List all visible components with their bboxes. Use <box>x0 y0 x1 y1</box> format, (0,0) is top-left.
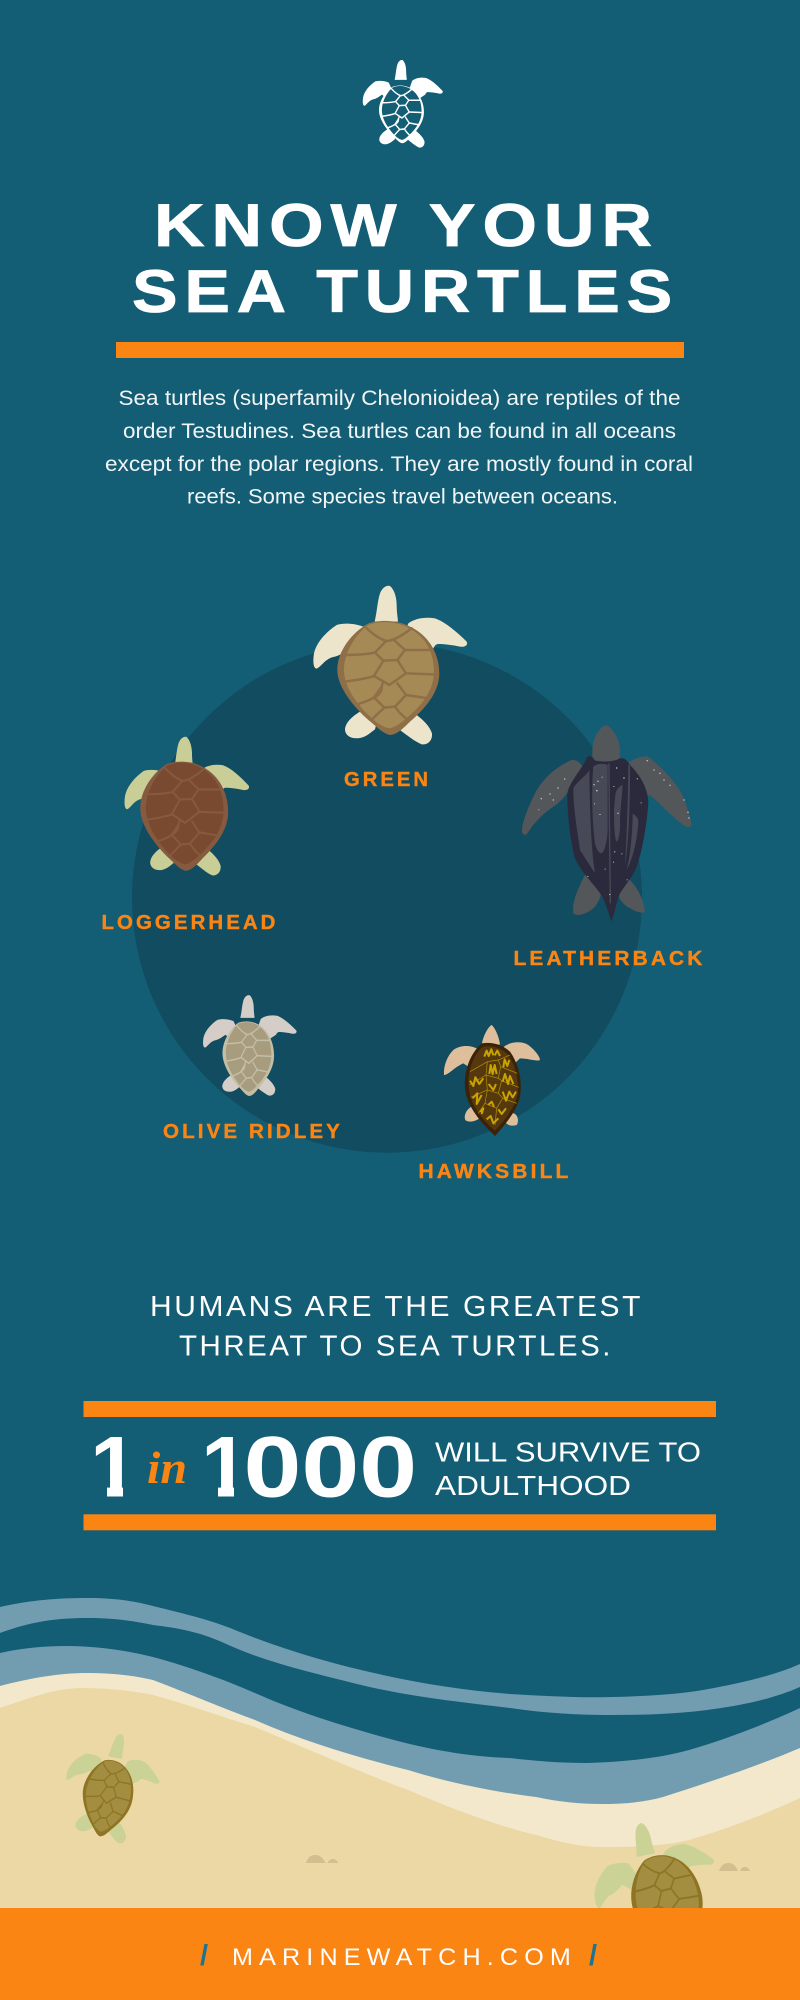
stat bar bottom <box>84 1514 716 1530</box>
stat: 1 in 1000 will survive to adulthood: 000 <box>244 1420 417 1515</box>
turtle: beach right <box>581 1810 733 1976</box>
stat: 1 in 1000 will survive to adulthood: 1 <box>90 1420 138 1516</box>
footer band <box>0 1908 800 2000</box>
turtle: leatherback <box>522 725 692 922</box>
stat: 1 in 1000 will survive to adulthood <box>96 1436 700 1498</box>
threat heading <box>150 1291 643 1362</box>
icon: sand mound centre <box>306 1855 338 1863</box>
stat: 1 in 1000 will survive to adulthood: ADULTHOOD <box>435 1470 631 1501</box>
icon: sand mound right <box>719 1863 750 1871</box>
turtle: hawksbill <box>444 1025 540 1136</box>
stat bar top <box>84 1401 716 1417</box>
turtle: olive ridley <box>203 995 297 1096</box>
title: KNOW YOUR <box>154 192 659 259</box>
label: loggerhead: LOGGERHEAD <box>102 912 278 934</box>
intro text: Sea turtles (superfamily Chelonioidea) are reptiles of the <box>118 387 680 410</box>
label: green: GREEN <box>344 769 431 791</box>
title <box>132 192 679 325</box>
intro text: reefs. Some species travel between oceans. <box>187 486 618 508</box>
dark circle behind turtles <box>132 643 642 1153</box>
wave: foam <box>0 1673 800 1908</box>
intro text: order Testudines. Sea turtles can be found in all oceans <box>123 420 676 443</box>
turtle: green <box>313 586 467 744</box>
stat: 1 in 1000 will survive to adulthood: WILL SURVIVE TO <box>435 1437 701 1468</box>
wave: inner band <box>0 1646 800 1908</box>
stat: 1 in 1000 will survive to adulthood: 1 <box>201 1420 249 1516</box>
label: hawksbill: HAWKSBILL <box>418 1161 572 1183</box>
wave: outer ribbon <box>0 1598 800 1715</box>
threat heading: THREAT TO SEA TURTLES. <box>179 1330 613 1362</box>
beach sand <box>0 1688 800 1908</box>
title: SEA TURTLES <box>132 258 679 325</box>
turtle: beach left <box>55 1725 167 1849</box>
intro text <box>105 387 693 508</box>
threat heading: HUMANS ARE THE GREATEST <box>150 1291 643 1323</box>
footer text: MARINEWATCH.COM <box>232 1944 577 1971</box>
label: leatherback: LEATHERBACK <box>514 948 706 970</box>
footer text: / <box>200 1940 208 1972</box>
icon: white sea turtle logo <box>363 60 443 148</box>
footer text: / <box>589 1940 597 1972</box>
label: olive ridley: OLIVE RIDLEY <box>163 1121 343 1143</box>
stat: 1 in 1000 will survive to adulthood: in <box>147 1442 187 1493</box>
intro text: except for the polar regions. They are mostly found in coral <box>105 453 693 476</box>
turtle: loggerhead <box>125 737 249 875</box>
title underline bar <box>116 342 684 358</box>
